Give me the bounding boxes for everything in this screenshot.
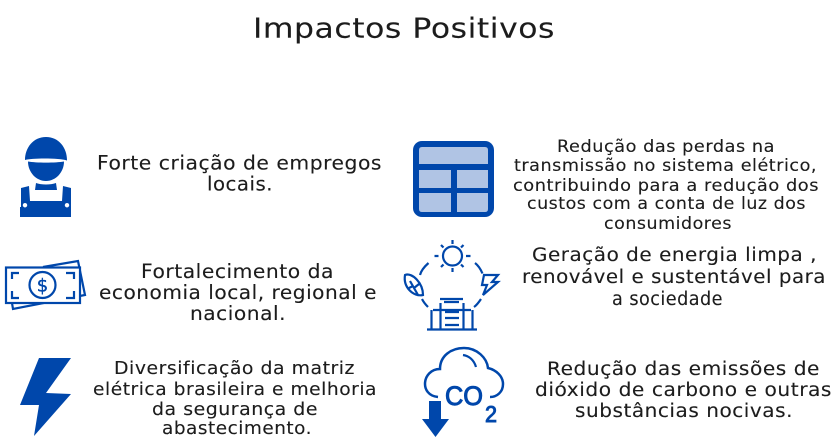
text: diversification: Diversificação da matriz	[114, 359, 355, 379]
text: economy: Fortalecimento da	[141, 260, 334, 283]
icon: clean energy cycle	[405, 240, 498, 330]
text: transmission losses: consumidores	[604, 214, 732, 233]
text: transmission losses: transmissão no sistema elétrico,	[514, 156, 817, 175]
text: economy	[99, 260, 377, 325]
icon: CO2 reduction: 2	[485, 401, 497, 427]
text: clean energy: a sociedade	[612, 289, 723, 310]
icon: construction worker	[20, 137, 71, 217]
text: emissions: substâncias nocivas.	[575, 401, 793, 422]
icon: banknotes: $	[37, 276, 48, 296]
text: clean energy: renovável e sustentável para	[522, 267, 826, 288]
text: diversification: abastecimento.	[162, 419, 312, 439]
text: transmission losses: custos com a conta de luz dos	[527, 194, 806, 213]
icon: banknotes	[6, 261, 85, 309]
icon: CO2 reduction	[422, 348, 503, 437]
text: diversification	[93, 359, 377, 439]
text: transmission losses: contribuindo para a redução dos	[513, 176, 819, 195]
icon: CO2 reduction: CO	[445, 381, 483, 411]
text: jobs	[97, 152, 382, 196]
text: emissions: dióxido de carbono e outras	[535, 380, 832, 401]
icon: lightning bolt	[20, 358, 71, 436]
text: emissions	[535, 359, 832, 422]
text: diversification: elétrica brasileira e melhoria	[93, 380, 377, 400]
text: jobs: Forte criação de empregos	[97, 152, 382, 174]
text: transmission losses	[513, 137, 819, 233]
text: diversification: da segurança de	[152, 400, 318, 420]
text: clean energy: Geração de energia limpa ,	[532, 245, 817, 266]
text: clean energy	[522, 245, 826, 310]
text: jobs: locais.	[207, 172, 273, 196]
text: economy: economia local, regional e	[99, 281, 377, 304]
text: emissions: Redução das emissões de	[547, 359, 820, 380]
text: transmission losses: Redução das perdas na	[557, 137, 775, 156]
text: economy: nacional.	[190, 302, 286, 325]
title: Impactos Positivos	[253, 12, 555, 44]
icon: grid panel	[413, 141, 494, 217]
